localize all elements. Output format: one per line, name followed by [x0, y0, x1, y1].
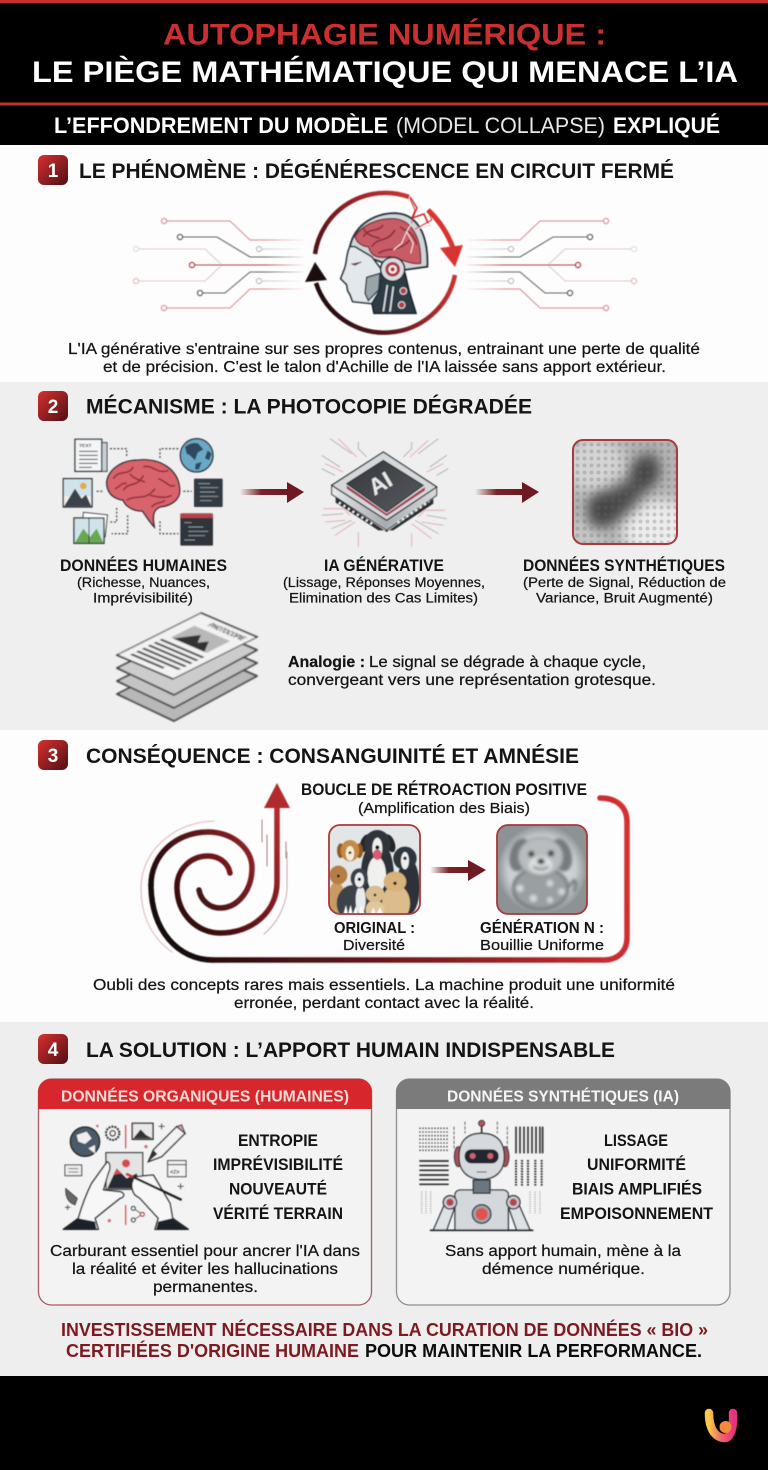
icon: AI chip [322, 439, 448, 547]
section 1 description [68, 341, 700, 376]
organic description: la réalité et éviter les hallucinations [72, 1261, 338, 1278]
section 3 badge [38, 740, 68, 770]
synthetic keywords: BIAIS AMPLIFIÉS [572, 1180, 702, 1198]
analogy text: convergeant vers une représentation grotesque. [288, 672, 656, 689]
organic description: permanentes. [153, 1279, 258, 1296]
label: generative AI: Elimination des Cas Limites) [289, 590, 478, 606]
organic keywords [213, 1132, 343, 1223]
subtitle [54, 113, 720, 138]
subtitle: (MODEL COLLAPSE) [396, 113, 605, 138]
icon: human data brain cluster: TEXT [79, 443, 92, 449]
subtitle: L’EFFONDREMENT DU MODÈLE [54, 113, 388, 138]
organic keywords: NOUVEAUTÉ [229, 1180, 327, 1198]
label: generation N: Bouillie Uniforme [480, 937, 604, 954]
circuit lines left [133, 218, 305, 311]
synthetic keywords: LISSAGE [604, 1132, 668, 1150]
icon: human data brain cluster [63, 439, 223, 546]
card header organic: DONNÉES ORGANIQUES (HUMAINES) [61, 1086, 349, 1106]
title [32, 18, 738, 89]
panel: section 3 consequence [0, 730, 768, 1022]
spiral feedback loop with arrow [141, 783, 627, 960]
header band [0, 0, 768, 145]
arrow 1 [240, 482, 304, 503]
label: human data [60, 556, 227, 606]
title: AUTOPHAGIE NUMÉRIQUE : [163, 18, 606, 52]
icon: robot with patterns [419, 1120, 543, 1230]
section 1 description: et de précision. C'est le talon d'Achille de l'IA laissée sans apport extérieur. [103, 359, 666, 376]
section 3 heading: CONSÉQUENCE : CONSANGUINITÉ ET AMNÉSIE [86, 743, 579, 768]
conclusion callout: CERTIFIÉES D'ORIGINE HUMAINE [66, 1340, 359, 1361]
conclusion callout: POUR MAINTENIR LA PERFORMANCE. [365, 1341, 702, 1361]
panel: section 2 mechanism [0, 382, 768, 730]
analogy text: Le signal se dégrade à chaque cycle, [369, 654, 646, 671]
card: synthetic data [396, 1079, 730, 1305]
section 2 badge: 2 [48, 397, 58, 418]
loop label: BOUCLE DE RÉTROACTION POSITIVE [301, 780, 587, 799]
label: synthetic data: (Perte de Signal, Réduction de [523, 575, 726, 590]
synthetic keywords: UNIFORMITÉ [587, 1155, 686, 1174]
section 4 badge [38, 1034, 68, 1064]
subtitle: EXPLIQUÉ [613, 113, 720, 138]
arrow 2 [475, 482, 539, 503]
label: human data: Imprévisibilité) [93, 590, 193, 606]
section 2 badge [38, 391, 68, 421]
label: generative AI: IA GÉNÉRATIVE [324, 556, 444, 575]
synthetic description: Sans apport humain, mène à la [445, 1243, 681, 1260]
label: synthetic data [523, 556, 726, 606]
icon: closed loop ring with arrows [305, 193, 463, 333]
icon: cyborg head with cracked brain [341, 198, 432, 313]
organic keywords: IMPRÉVISIBILITÉ [213, 1155, 343, 1174]
conclusion callout: INVESTISSEMENT NÉCESSAIRE DANS LA CURATION DE DONNÉES « BIO » [61, 1319, 708, 1340]
label: original [334, 920, 415, 954]
card: organic data [38, 1079, 372, 1305]
label: synthetic data: DONNÉES SYNTHÉTIQUES [523, 556, 725, 575]
icon: degraded noise image [572, 439, 678, 545]
organic description: Carburant essentiel pour ancrer l'IA dans [50, 1243, 360, 1260]
section 1 description: L'IA générative s'entraine sur ses propres contenus, entrainant une perte de qualité [68, 341, 700, 358]
synthetic keywords [560, 1132, 713, 1223]
section 1 heading: LE PHÉNOMÈNE : DÉGÉNÉRESCENCE EN CIRCUIT FERMÉ [79, 158, 674, 183]
label: original: Diversité [343, 937, 405, 954]
icon: hands creating: </> [170, 1169, 180, 1176]
section 3 description [93, 977, 675, 1012]
label: human data: (Richesse, Nuances, [77, 575, 210, 590]
footer band [0, 1376, 768, 1470]
title: LE PIÈGE MATHÉMATIQUE QUI MENACE L’IA [32, 55, 738, 89]
icon: hands creating [63, 1123, 188, 1230]
label: generative AI: (Lissage, Réponses Moyennes, [283, 575, 485, 590]
label: generation N: GÉNÉRATION N : [480, 920, 604, 937]
label: human data: DONNÉES HUMAINES [60, 556, 227, 575]
section 2 heading: MÉCANISME : LA PHOTOCOPIE DÉGRADÉE [86, 394, 532, 418]
icon: AI chip: AI [364, 466, 397, 500]
organic description [50, 1243, 360, 1296]
label: synthetic data: Variance, Bruit Augmenté) [536, 590, 713, 606]
synthetic keywords: EMPOISONNEMENT [560, 1205, 713, 1223]
organic keywords: VÉRITÉ TERRAIN [213, 1204, 343, 1223]
icon: stack of degraded photocopies: PHOTOCOPIE [205, 622, 249, 642]
panel: section 1 phenomenon [0, 145, 768, 382]
section 4 badge: 4 [48, 1040, 59, 1061]
label: generative AI [283, 556, 485, 606]
section 4 heading: LA SOLUTION : L’APPORT HUMAIN INDISPENSABLE [86, 1038, 615, 1062]
analogy text: Analogie : [288, 654, 365, 671]
circuit lines right [465, 218, 637, 311]
arrow 3 [430, 860, 486, 881]
analogy text [288, 654, 656, 689]
section 3 description: erronée, perdant contact avec la réalité. [234, 995, 534, 1012]
card header synthetic: DONNÉES SYNTHÉTIQUES (IA) [447, 1086, 679, 1106]
organic keywords: ENTROPIE [238, 1132, 318, 1150]
synthetic description: démence numérique. [482, 1261, 645, 1278]
icon: stack of degraded photocopies [117, 613, 257, 721]
panel: section 4 solution [0, 1022, 768, 1376]
loop label [301, 780, 587, 817]
synthetic description [445, 1243, 681, 1278]
section 1 badge [38, 155, 68, 185]
loop label: (Amplification des Biais) [358, 801, 530, 817]
label: original: ORIGINAL : [334, 920, 415, 937]
label: generation N [480, 920, 604, 954]
section 1 badge: 1 [48, 161, 59, 182]
section 3 description: Oubli des concepts rares mais essentiels. La machine produit une uniformité [93, 977, 675, 994]
icon: logo [709, 1413, 733, 1438]
section 3 badge: 3 [48, 746, 58, 767]
image: diverse dogs [328, 825, 420, 922]
image: uniform blurred dog [497, 825, 587, 914]
conclusion callout [61, 1319, 708, 1361]
